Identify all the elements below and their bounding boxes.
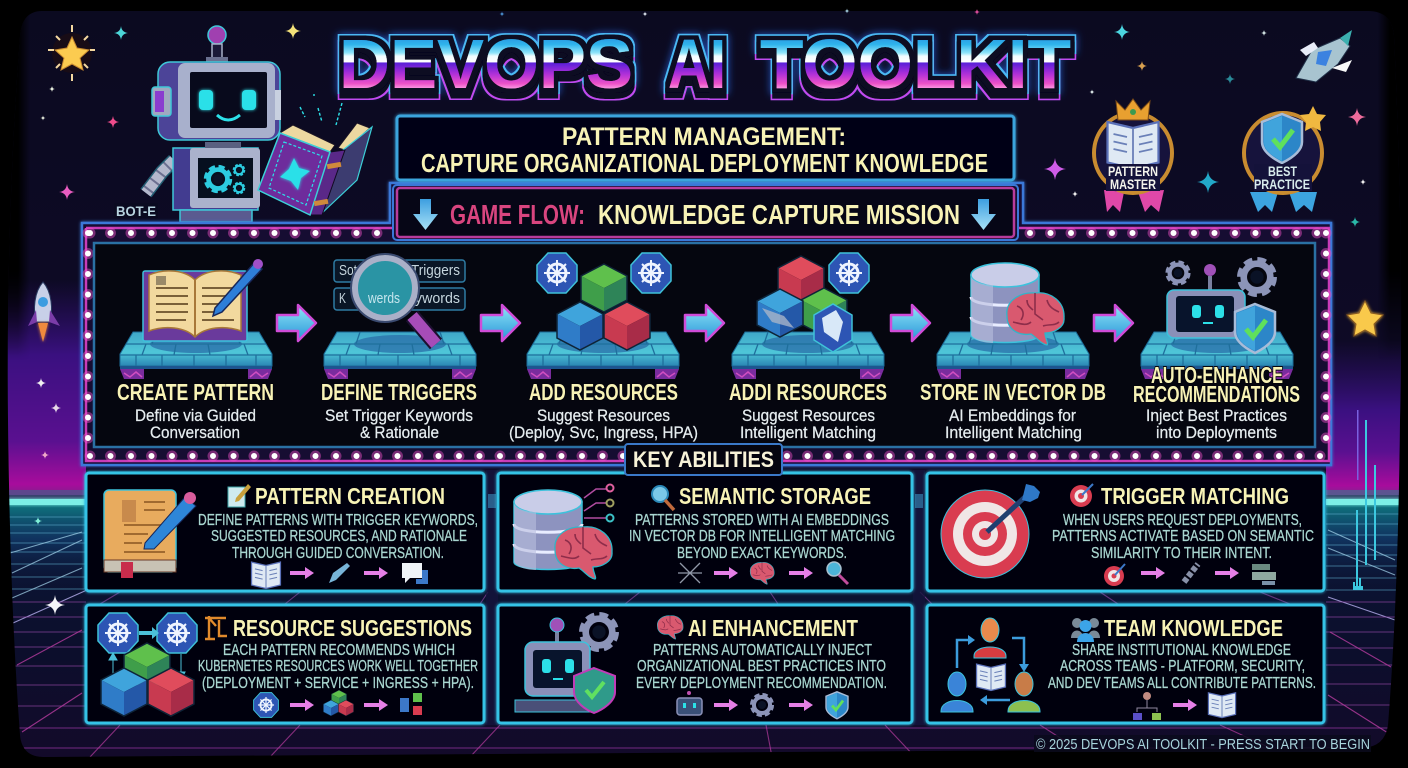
title: DEVOPS — [339, 25, 633, 103]
card heading: TRIGGER MATCHING — [1101, 483, 1289, 509]
panel: semantic storage — [498, 473, 912, 591]
step title: AUTO-ENHANCE — [1151, 362, 1283, 388]
subtitle panel — [397, 116, 1014, 180]
icon: glowing book — [258, 94, 372, 215]
key abilities label: KEY ABILITIES — [633, 447, 774, 472]
marquee frame — [82, 183, 1331, 465]
panel: team knowledge — [927, 605, 1324, 723]
badge: best practice — [1244, 106, 1326, 212]
step description: Intelligent Matching — [945, 423, 1082, 442]
flow icons — [1133, 692, 1236, 720]
arrow 5 — [1094, 305, 1133, 341]
panel: pattern creation — [86, 473, 484, 591]
card description: EACH PATTERN RECOMMENDS WHICH — [223, 642, 455, 659]
step description — [945, 406, 1082, 442]
step title: CREATE PATTERN — [117, 379, 274, 405]
icon: hex badges and cubes — [98, 613, 197, 716]
game flow label: GAME FLOW: — [450, 199, 585, 230]
card description: (DEPLOYMENT + SERVICE + INGRESS + HPA). — [202, 675, 474, 692]
title: AI — [668, 25, 726, 103]
icon: gold star right — [1347, 301, 1383, 336]
step description — [325, 406, 473, 442]
title — [339, 25, 1071, 103]
icon: magnifier over trigger tags: Sot — [339, 262, 358, 279]
card heading: AI ENHANCEMENT — [688, 615, 858, 641]
card heading: RESOURCE SUGGESTIONS — [233, 615, 472, 641]
card heading: SEMANTIC STORAGE — [679, 483, 871, 509]
card description — [1048, 642, 1316, 692]
step description: Set Trigger Keywords — [325, 406, 473, 425]
step title: STORE IN VECTOR DB — [920, 379, 1106, 405]
flow icons — [254, 690, 422, 717]
card description: EVERY DEPLOYMENT RECOMMENDATION. — [636, 675, 887, 692]
step description: & Rationale — [360, 423, 439, 442]
step description: AI Embeddings for — [949, 406, 1076, 425]
card heading: PATTERN CREATION — [255, 483, 445, 509]
icon: team sharing a book — [941, 618, 1040, 712]
icon: magnifier over trigger tags: Triggers — [411, 262, 460, 279]
Bot-E label: BOT-E — [116, 203, 156, 219]
step description — [1146, 406, 1287, 442]
icon: robot with gear and shield — [515, 617, 615, 713]
background stars — [34, 8, 1366, 615]
icon: target emoji — [1070, 484, 1093, 507]
step 3: add resources — [509, 253, 698, 442]
step 5: store in vector db — [920, 263, 1106, 442]
arrow 4 — [891, 305, 930, 341]
icon: resource cubes and hex badges — [537, 253, 671, 350]
icon: database and brain — [971, 263, 1064, 345]
icon: magnifier emoji — [652, 486, 674, 510]
icon: open book and pen — [143, 259, 263, 341]
step description: Suggest Resources — [742, 406, 875, 425]
card description — [198, 642, 478, 692]
icon: robot mascot Bot-E — [114, 26, 372, 222]
panel: resource suggestions — [86, 605, 484, 723]
flow icons — [1104, 564, 1276, 586]
step title: ADDI RESOURCES — [729, 379, 887, 405]
step description: Suggest Resources — [537, 406, 670, 425]
title: TOOLKIT — [760, 25, 1071, 103]
card description: ORGANIZATIONAL BEST PRACTICES INTO — [637, 658, 886, 675]
card description: DEFINE PATTERNS WITH TRIGGER KEYWORDS, — [198, 512, 478, 529]
card description: PATTERNS AUTOMATICALLY INJECT — [653, 642, 872, 659]
panel: trigger matching — [927, 473, 1324, 591]
step description — [740, 406, 876, 442]
step description: Conversation — [150, 423, 240, 442]
card description: PATTERNS STORED WITH AI EMBEDDINGS — [635, 512, 889, 529]
card description — [198, 512, 478, 562]
step 1: create pattern — [117, 259, 274, 442]
badge: pattern master — [1094, 99, 1172, 212]
flow icons — [252, 562, 428, 588]
arrow 2 — [481, 305, 520, 341]
icon: memo emoji — [228, 484, 251, 507]
panel: AI enhancement — [498, 605, 912, 723]
card description: THROUGH GUIDED CONVERSATION. — [232, 545, 444, 562]
card description: BEYOND EXACT KEYWORDS. — [677, 545, 847, 562]
step description: Inject Best Practices — [1146, 406, 1287, 425]
step title: DEFINE TRIGGERS — [321, 379, 477, 405]
subtitle heading: PATTERN MANAGEMENT: — [562, 123, 846, 151]
icon: rocket — [28, 282, 60, 342]
icon: book and pen — [104, 490, 196, 578]
badge: pattern master: MASTER — [1110, 176, 1156, 192]
icon: robot, gears and shield — [1167, 262, 1275, 353]
step description: into Deployments — [1156, 423, 1277, 442]
card heading: TEAM KNOWLEDGE — [1104, 615, 1283, 641]
card description: IN VECTOR DB FOR INTELLIGENT MATCHING — [629, 528, 895, 545]
card description: ACROSS TEAMS - PLATFORM, SECURITY, — [1060, 658, 1305, 675]
step 4: addi resources — [729, 253, 887, 442]
icon: brain emoji — [657, 616, 683, 639]
step 2: define triggers — [321, 254, 477, 442]
card description: PATTERNS ACTIVATE BASED ON SEMANTIC — [1052, 528, 1314, 545]
icon: target with arrow — [941, 484, 1040, 578]
icon: down arrow left — [413, 199, 438, 230]
icon: gold star top left — [48, 25, 95, 81]
step title: RECOMMENDATIONS — [1133, 381, 1300, 407]
card description: SHARE INSTITUTIONAL KNOWLEDGE — [1072, 642, 1291, 659]
subtitle description: CAPTURE ORGANIZATIONAL DEPLOYMENT KNOWLEDGE — [421, 148, 988, 178]
step description — [509, 406, 698, 442]
arrow 3 — [685, 305, 724, 341]
card description — [636, 642, 887, 692]
step title — [1133, 362, 1300, 407]
card description — [629, 512, 895, 562]
badge: best practice: BEST — [1268, 163, 1297, 179]
step description: Define via Guided — [135, 406, 256, 425]
step description: (Deploy, Svc, Ingress, HPA) — [509, 423, 698, 442]
badge: best practice: PRACTICE — [1254, 176, 1310, 192]
icon: magnifier over trigger tags: werds — [367, 290, 400, 307]
icon: magnifier over trigger tags — [334, 254, 465, 344]
icon: database with brain — [514, 484, 614, 579]
game flow mission: KNOWLEDGE CAPTURE MISSION — [598, 199, 960, 230]
flow icons — [677, 691, 848, 719]
game flow banner — [393, 185, 1018, 240]
step 6: auto-enhance recommendations — [1133, 262, 1300, 442]
flow icons — [678, 562, 848, 584]
icon: cube cluster — [757, 253, 869, 352]
step description — [135, 406, 256, 442]
card description: KUBERNETES RESOURCES WORK WELL TOGETHER — [198, 658, 478, 675]
icon: crane emoji — [205, 616, 227, 639]
icon: magnifier over trigger tags: ywords — [415, 290, 460, 307]
panel: game flow steps — [94, 243, 1315, 447]
icon: people emoji — [1071, 618, 1100, 642]
step title: ADD RESOURCES — [529, 379, 678, 405]
icon: down arrow right — [971, 199, 996, 230]
icon: spaceship — [1296, 30, 1352, 82]
card description — [1052, 512, 1314, 562]
card description: WHEN USERS REQUEST DEPLOYMENTS, — [1063, 512, 1302, 529]
badge: pattern master: PATTERN — [1108, 163, 1158, 179]
icon: magnifier over trigger tags: K — [339, 290, 346, 307]
card description: SUGGESTED RESOURCES, AND RATIONALE — [211, 528, 467, 545]
arrow 1 — [277, 305, 316, 341]
card description: AND DEV TEAMS ALL CONTRIBUTE PATTERNS. — [1048, 675, 1316, 692]
step description: Intelligent Matching — [740, 423, 876, 442]
card description: SIMILARITY TO THEIR INTENT. — [1091, 545, 1272, 562]
